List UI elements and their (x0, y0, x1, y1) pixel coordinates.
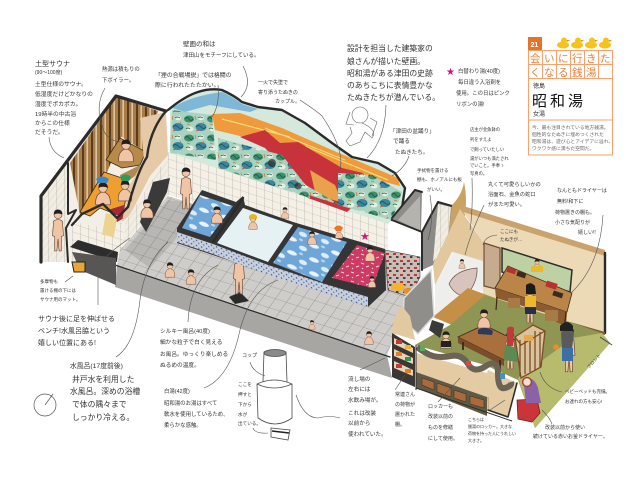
note: baby bed: ベビーベッドも完備。 (565, 388, 610, 395)
note: earthen sauna: 低湿度だけどかなりの (35, 90, 93, 98)
series heading: な (544, 67, 554, 79)
pool: mizuburo (182, 195, 233, 237)
note: shelf: 手拭物を置ける (417, 167, 448, 174)
note: round basin: 浴面石、金魚の蛇口 (488, 190, 536, 198)
note: sauna mat: 置ける棚の下には (40, 287, 76, 294)
note: tanuki couple (258, 79, 300, 105)
note: mural subject: 壁画の和は (183, 39, 216, 48)
note: sauna mat (40, 278, 80, 303)
series heading: 銭 (572, 66, 583, 79)
benches (70, 178, 170, 285)
front grey wall (115, 265, 392, 378)
note: large lockers: 大きさ。 (468, 437, 484, 443)
note: goldfish: 湯がいつも満たされ (470, 155, 509, 162)
note: press here: 水が (238, 411, 248, 418)
note: sauna mat: 多摩物も (40, 278, 58, 285)
note: lockers (428, 404, 458, 442)
note: white bath (164, 387, 229, 429)
note: tanuki couple: 寄り添うたぬきの (258, 89, 298, 96)
water fountain drawing (257, 350, 292, 440)
note: regulars shelf: 棚。 (395, 421, 405, 428)
person with green skirt (504, 326, 518, 369)
floor of changing room (415, 288, 612, 428)
note: goldfish (470, 126, 509, 177)
note: drinking fountain: 左右には (348, 385, 371, 393)
note: earthen sauna: 土型サウナ (35, 59, 70, 68)
note: silky bath: シルキー風呂(40度) (160, 327, 210, 335)
note: mural designer (347, 43, 440, 102)
note: white bath: 白湯(42度) (164, 387, 190, 395)
baby crib (515, 325, 545, 378)
note: lockers: にして使用。 (428, 435, 458, 442)
note: mural subject: 津田山をモチーフにしている。 (183, 51, 260, 59)
note: white bath: 柔らかな感触。 (164, 421, 202, 429)
note: regulars shelf: の荷物が (395, 401, 415, 408)
note: tanuki battle: 「狸の合戦場説」では格闘の (155, 71, 232, 79)
note: goldfish: 店主が金魚鉢の (470, 126, 500, 133)
note: round basin (488, 180, 541, 208)
note: tanuki here too (500, 229, 522, 243)
pool: silky (217, 208, 293, 262)
note: red dryer: 続けている赤いお釜ドライヤー。 (533, 433, 608, 440)
back wall of changing room (433, 205, 605, 335)
note: bench: ベンチ!水風呂脇という (38, 326, 110, 335)
floor shading (125, 200, 200, 268)
white wall with washbasin (435, 252, 483, 317)
note: tanuki here too: ここにも (500, 229, 518, 235)
note: round basin: がまた可愛い。 (488, 200, 525, 208)
note: press here (238, 381, 261, 427)
note: large lockers (468, 416, 516, 443)
series heading: た (600, 53, 610, 65)
note: press here: 出ている。 (238, 420, 261, 427)
note: large lockers: 銭湯のロッカー。大きな (468, 423, 512, 429)
note: red dryer: 改装以前から使い (545, 424, 585, 431)
central bench with seated person (458, 309, 525, 370)
note: bench: サウナ後に足を伸ばせる (38, 314, 115, 323)
note: daily bath: 毎日違う入浴剤を (458, 78, 501, 86)
note: sauna mat: サウナ用のマット。 (40, 296, 80, 303)
series heading: い (544, 53, 554, 65)
series heading: き (586, 53, 596, 65)
note: regulars shelf: 置かれた (395, 411, 415, 418)
prefecture: 徳島 (533, 82, 545, 90)
note: lockers: ロッカーも (428, 404, 453, 410)
locker counter (416, 345, 517, 421)
door (484, 243, 500, 290)
note: earthen sauna (35, 59, 93, 136)
note: large lockers: こちらは (468, 416, 484, 422)
note: round basin: 丸くて可愛らしいかの (488, 180, 541, 188)
note: silky bath (160, 327, 228, 369)
mural (168, 89, 405, 224)
note: tanuki couple: 一火で失墜で (258, 79, 288, 86)
note: earthen sauna: だそうだ。 (35, 129, 64, 136)
note: cold bath (70, 361, 140, 422)
note: earthen sauna: からこの仕様 (35, 119, 70, 127)
glass door (403, 270, 434, 334)
note: free dryer: なんともドライヤーは (557, 187, 607, 194)
note: press here: ここを (238, 381, 252, 387)
note: cold bath: 水風呂(17度前後) (70, 361, 123, 370)
description: 今、最も注目されている地方銭湯。 (532, 124, 609, 131)
series heading: 湯 (586, 67, 597, 79)
note: free dryer: 無料!和下に (557, 198, 583, 205)
note: regulars shelf: 常連さん (395, 391, 415, 398)
note: heat source: 下ボイラー。 (102, 76, 134, 84)
note: drinking fountain: 水飲み場が。 (348, 396, 381, 404)
note: earthen sauna: (90〜100度) (35, 69, 63, 76)
left goods shelf (392, 306, 415, 387)
note: lockers: 改装以前の (428, 413, 453, 420)
series heading: 会 (530, 52, 541, 65)
note: silky bath: 細かな粒子で白く見える (160, 338, 222, 346)
back tile wall (168, 152, 388, 262)
panel frame (528, 50, 613, 155)
person at shelf (429, 320, 452, 348)
issue number badge: 21 (530, 42, 538, 49)
star marker: ★ (360, 230, 370, 243)
standing person with towel (553, 322, 575, 372)
tanuki sketch (346, 107, 377, 146)
note: daily bath (446, 67, 510, 108)
note: earthen sauna: 土型仕様のサウナ。 (35, 80, 87, 88)
description: ワクワク感に満ちた空間だ。 (532, 145, 594, 152)
vanity counter with chairs (495, 266, 572, 330)
merchandise rack and partition (385, 182, 466, 297)
note: baby bed (565, 388, 610, 405)
description: 昭和湯は、遊び心とアイデアに溢れ、 (532, 138, 613, 145)
series heading: る (558, 67, 568, 79)
mirror window (502, 248, 572, 292)
note: silky bath: お風呂。ゆっくり楽しめる (160, 350, 228, 358)
note: cold bath: 井戸水を利用した (72, 374, 135, 384)
note: daily bath: 白替わり湯(40度) (458, 67, 500, 75)
note: large lockers: 荷物を持った人にうれしい (468, 430, 516, 436)
note: red dryer (533, 424, 608, 440)
note: daily bath: ★ (446, 67, 455, 78)
note: white bath: 昭和湯のお湯はすべて (164, 399, 217, 407)
note: tanuki battle: 際に行われたたたかい。 (155, 81, 220, 89)
leader lines (49, 66, 603, 433)
note: mural designer: たぬきたちが潜んでいる。 (347, 92, 440, 102)
note: white bath: 軟水を使用しているため、 (164, 410, 229, 418)
series heading: 行 (572, 52, 583, 65)
note: press here: 押すと (238, 391, 252, 398)
illustration: cutaway of Showa-yu bathhouse (41, 89, 612, 428)
tile floor (117, 196, 415, 355)
note: goldfish: 列をすえよ (470, 136, 491, 143)
note: earthen sauna: 19時半の中古浴 (35, 110, 76, 118)
title panel (528, 37, 613, 155)
note: goldfish: 写真の。 (470, 170, 487, 177)
series heading: く (530, 67, 540, 79)
note: daily bath: リボンの湯! (456, 100, 485, 108)
person in mirror (531, 259, 543, 272)
note: cold bath: しっかり冷える。 (72, 412, 134, 422)
note: free dryer (555, 187, 607, 236)
note: bench: 嬉しい位置にある! (38, 338, 96, 347)
note: tanuki couple: カップル。 (275, 99, 300, 105)
note: earthen sauna: 湿度でポカポカ。 (35, 100, 81, 108)
note: baby bed: お連れの方も安心! (565, 398, 602, 405)
person at vanity (525, 283, 536, 323)
note: tanuki dance: 「津田の盆踊り」 (390, 127, 435, 135)
note: front desk: フロント (586, 353, 602, 370)
series heading: に (558, 53, 568, 65)
description (532, 124, 613, 152)
four bath pools (177, 190, 386, 307)
note: goldfish: でいこと。手奉ゝ (470, 162, 504, 169)
description: 個性的なたぬきに埋めつくされた (532, 131, 604, 138)
note: goldfish: で飼っていたしい (470, 147, 504, 153)
note: shelf (417, 167, 462, 193)
bath type: 女湯 (533, 110, 545, 118)
note: free dryer: 荷物置きの棚も。 (555, 209, 595, 216)
note: cold bath: で体の隅々まで (72, 399, 127, 409)
note: silky bath: ぬるめの温度。 (160, 361, 200, 369)
note: shelf: がいい。 (427, 186, 445, 193)
note: mural designer: 設計を担当した建築家の (347, 43, 433, 53)
note: drinking fountain (348, 375, 387, 438)
note: press here: 下から (238, 401, 252, 408)
note: heat source: 熱源は積もりの (102, 65, 140, 73)
note: mural designer: のあちこちに表情豊かな (347, 80, 433, 90)
note: tanuki dance: で踊る (393, 138, 410, 145)
note: tanuki battle (155, 71, 232, 89)
note: tanuki here too: たぬきが… (500, 236, 522, 243)
note: shelf: 棚も、ホノアルにも板 (417, 176, 462, 183)
note: mural designer: 娘さんが描いた壁画。 (347, 56, 425, 66)
people on tile floor (141, 168, 373, 344)
note: drinking fountain: 以前から (348, 419, 370, 427)
red hair dryer (517, 378, 541, 422)
note: lockers: ものを修繕 (428, 424, 453, 431)
note: mural designer: 昭和湯がある津田の史跡 (347, 68, 433, 78)
pool: white bath (273, 227, 347, 282)
note: drinking fountain: これは改装 (348, 409, 376, 417)
rubber ducks rating (557, 38, 612, 48)
note: drinking fountain: 使われていた。 (348, 430, 387, 438)
note: drinking fountain: 流し場の (348, 375, 371, 383)
note: mural subject (183, 39, 260, 59)
side tile wall (124, 155, 168, 262)
note: free dryer: 嬉しい!! (578, 229, 596, 236)
note: tanuki dance (390, 127, 435, 156)
note: tanuki dance: たぬきたち。 (395, 149, 428, 156)
note: cold bath: 水風呂。深めの浴槽 (70, 386, 140, 396)
note: regulars shelf (395, 391, 415, 428)
note: daily bath: 使用。この日はピンク (456, 89, 510, 97)
note: cup: コップ (242, 353, 257, 359)
bathhouse name: 昭和湯 (532, 93, 586, 110)
note: free dryer: 小さな気配りが (555, 219, 590, 226)
pool: pink bath (332, 245, 385, 288)
sauna room (41, 96, 168, 262)
note: bench (38, 314, 115, 347)
series heading (530, 52, 610, 79)
compass circle (34, 394, 56, 416)
note: heat source (102, 65, 140, 84)
